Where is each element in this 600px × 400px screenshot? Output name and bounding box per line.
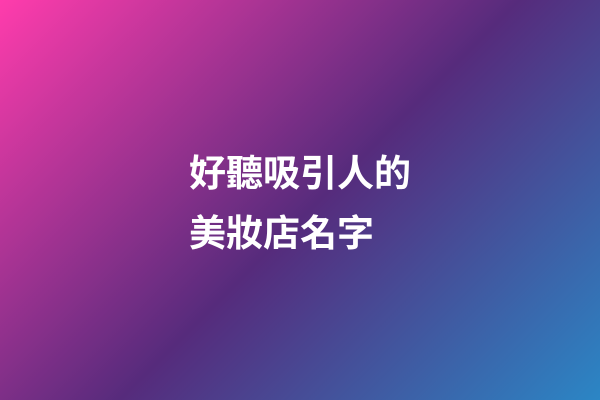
title: [189, 152, 411, 254]
title: 好聽吸引人的: [189, 152, 411, 194]
title: 美妝店名字: [189, 212, 374, 254]
